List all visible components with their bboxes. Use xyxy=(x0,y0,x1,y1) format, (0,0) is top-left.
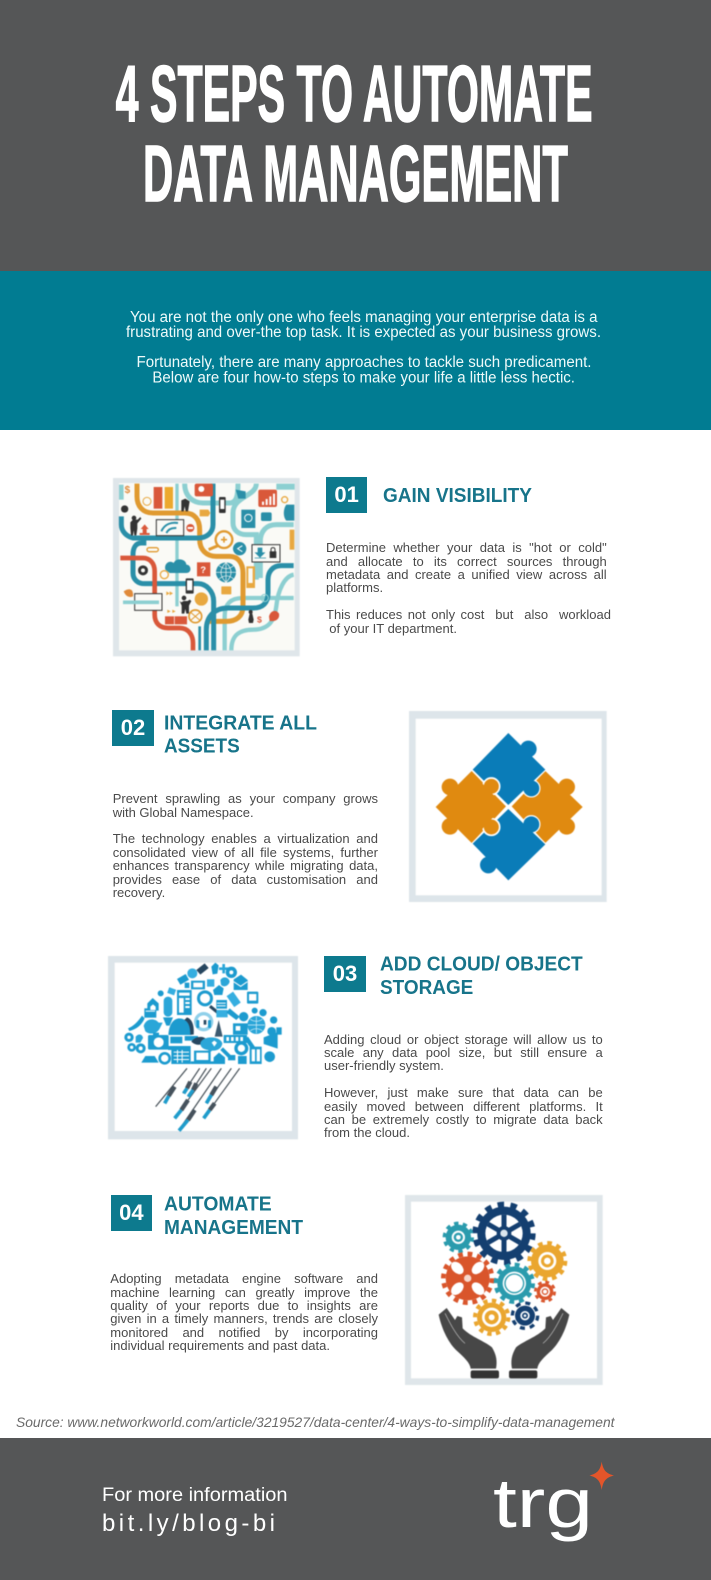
right hand xyxy=(509,1308,569,1378)
text: step 01 body: This reduces not only cost but also workload xyxy=(326,607,611,622)
title xyxy=(116,49,593,218)
text: step 02 body: with Global Namespace. xyxy=(113,805,254,820)
left orange piece xyxy=(436,771,506,843)
navy gear xyxy=(477,1207,531,1260)
text: step 03 body xyxy=(324,1032,603,1140)
icon: puzzle pieces xyxy=(408,710,607,902)
icon details in white xyxy=(128,970,260,1063)
bottom blue piece xyxy=(473,809,545,880)
text: step 02 body: consolidated view of all file systems, further xyxy=(113,845,378,860)
intro band xyxy=(0,270,711,430)
text: step 02 body: The technology enables a virtualization and xyxy=(113,831,378,846)
cable plugs xyxy=(156,1068,240,1131)
heading: add cloud object storage xyxy=(380,953,583,999)
teal middle gear xyxy=(497,1266,531,1300)
call to action xyxy=(102,1485,288,1537)
text: step 02 body: enhances transparency while migrating data, xyxy=(113,858,378,873)
left hand xyxy=(439,1308,499,1378)
heading: integrate all assets: INTEGRATE ALL xyxy=(164,711,317,734)
text: step 01 body: and allocate to its correct sources through xyxy=(326,554,607,569)
step number 03 xyxy=(324,956,366,992)
heading: automate management: MANAGEMENT xyxy=(164,1216,304,1239)
text: step 04 body xyxy=(110,1271,378,1353)
panel: step 03 add cloud object storage xyxy=(108,953,603,1140)
text: step 01 body: platforms. xyxy=(326,580,383,595)
heading: automate management: AUTOMATE xyxy=(164,1193,272,1216)
text: step 04 body: individual requirements and past data. xyxy=(110,1338,330,1353)
top blue piece xyxy=(473,733,545,805)
cloud made of small blue icons xyxy=(125,963,282,1065)
intro text: Fortunately, there are many approaches to tackle such predicament. xyxy=(136,354,592,371)
call to action: For more information xyxy=(102,1485,288,1506)
orange gear xyxy=(446,1256,490,1300)
navy small gear xyxy=(515,1306,535,1326)
step number 02 xyxy=(112,710,154,746)
text: step 02 body: provides ease of data customisation and xyxy=(113,872,378,887)
text: step 04 body: Adopting metadata engine software and xyxy=(110,1271,378,1286)
text: step 04 body: monitored and notified by incorporating xyxy=(110,1325,378,1340)
intro text xyxy=(126,309,601,386)
step number 04: 04 xyxy=(119,1200,144,1225)
small icons: $ xyxy=(125,485,131,496)
heading: add cloud object storage: STORAGE xyxy=(380,976,473,999)
text: step 01 body: Determine whether your data is "hot or cold" xyxy=(326,540,607,555)
icon: cloud of icons with cables xyxy=(108,956,298,1140)
step number 04 xyxy=(111,1195,152,1231)
heading: gain visibility: GAIN VISIBILITY xyxy=(383,484,532,507)
small icons: ? xyxy=(201,565,207,575)
intro text: Below are four how-to steps to make your life a little less hectic. xyxy=(152,369,575,386)
icon: data flow illustration xyxy=(112,478,300,656)
text: step 04 body: machine learning can greatly improve the xyxy=(110,1285,378,1300)
text: step 03 body: user-friendly system. xyxy=(324,1058,444,1073)
heading: integrate all assets: ASSETS xyxy=(164,735,240,758)
gold gear xyxy=(531,1245,564,1277)
text: step 03 body: easily moved between different platforms. It xyxy=(324,1099,603,1114)
heading: automate management xyxy=(164,1193,304,1239)
call to action: bit.ly/blog-bi xyxy=(102,1510,275,1537)
heading: integrate all assets xyxy=(164,711,317,758)
small icons xyxy=(121,484,295,625)
step number 01 xyxy=(326,477,367,513)
icon: hands holding gears xyxy=(404,1194,603,1386)
teal small gear xyxy=(446,1225,471,1250)
step number 02: 02 xyxy=(121,715,145,740)
header band with title xyxy=(0,0,711,270)
text: step 01 body: of your IT department. xyxy=(329,621,457,636)
text: step 03 body: However, just make sure that data can be xyxy=(324,1085,603,1100)
intro text: frustrating and over-the top task. It is expected as your business grows. xyxy=(126,324,601,341)
text: step 03 body: from the cloud. xyxy=(324,1125,410,1140)
step number 01: 01 xyxy=(334,482,359,507)
intro text: You are not the only one who feels managing your enterprise data is a xyxy=(130,309,598,326)
icon: orange star xyxy=(590,1461,614,1490)
text: step 02 body xyxy=(112,791,378,900)
text: step 02 body: recovery. xyxy=(113,885,165,900)
panel: step 01 gain visibility xyxy=(112,477,611,656)
small icons: $ xyxy=(257,615,262,625)
step number 03: 03 xyxy=(333,961,357,986)
text: step 03 body: Adding cloud or object storage will allow us to xyxy=(324,1032,603,1047)
text: step 03 body: can be extremely costly to migrate data back xyxy=(324,1112,603,1127)
text: step 02 body: Prevent sprawling as your company grows xyxy=(113,791,378,806)
logo: trg xyxy=(493,1462,614,1542)
panel: step 02 integrate all assets xyxy=(112,710,607,902)
gold low gear xyxy=(477,1303,506,1332)
text: step 01 body: metadata and create a unified view across all xyxy=(326,567,607,582)
logo: trg: trg xyxy=(493,1464,593,1542)
panel: step 04 automate management xyxy=(110,1193,603,1386)
text: step 04 body: quality of your reports due to insights are xyxy=(110,1298,378,1313)
text: step 01 body xyxy=(326,540,611,636)
source line: Source: www.networkworld.com/article/3219527/data-center/4-ways-to-simplify-data-management xyxy=(16,1414,616,1430)
text: step 03 body: scale any data pool size, but still ensure a xyxy=(324,1045,603,1060)
footer band xyxy=(0,1438,711,1580)
orange interlocking knobs xyxy=(450,772,504,840)
heading: add cloud object storage: ADD CLOUD/ OBJECT xyxy=(380,953,583,976)
right orange piece xyxy=(512,771,583,843)
text: step 04 body: given in a timely manners, trends are closely xyxy=(110,1311,378,1326)
red small gear xyxy=(537,1283,553,1300)
